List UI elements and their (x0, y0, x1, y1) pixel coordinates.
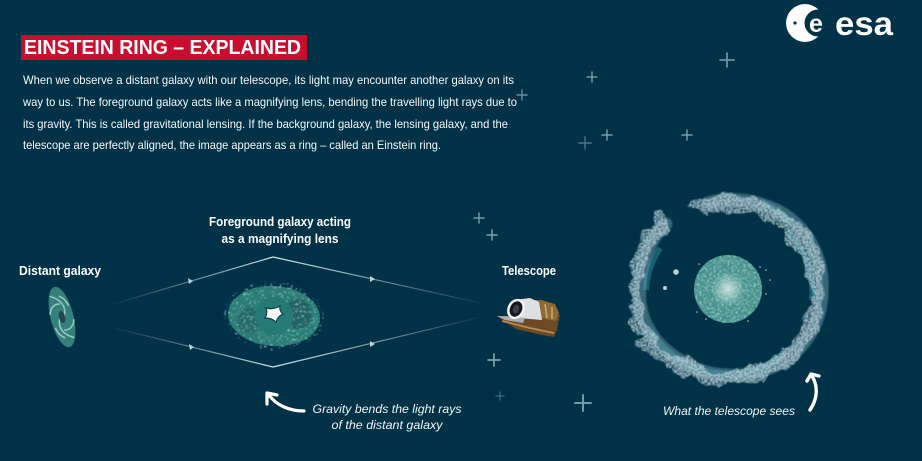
ring: speckled band (634, 203, 817, 378)
label: telescope: Telescope (502, 264, 556, 278)
small background dots (663, 263, 771, 322)
intro text block: telescope are perfectly aligned, the image appears as a ring – called an Einstein ring. (23, 139, 441, 152)
logo: esa: e (809, 10, 823, 38)
light rays (110, 257, 485, 367)
logo: esa (786, 4, 894, 42)
label: foreground galaxy: as a magnifying lens (222, 232, 339, 246)
label: distant galaxy: Distant galaxy (19, 264, 101, 278)
ray: upper path (110, 257, 485, 305)
icon: distant galaxy (43, 284, 81, 350)
caption: gravity: of the distant galaxy (332, 418, 444, 432)
intro text block: its gravity. This is called gravitational lensing. If the background galaxy, the lensing galaxy, and the (23, 118, 508, 131)
stars (474, 53, 734, 411)
icon: foreground lensing galaxy (222, 279, 326, 353)
title: EINSTEIN RING – EXPLAINED (24, 37, 301, 59)
intro text block: When we observe a distant galaxy with our telescope, its light may encounter another galaxy on its (23, 74, 514, 87)
icon: curved arrow to rays (267, 393, 304, 411)
caption: gravity (312, 402, 462, 432)
central galaxy (694, 255, 762, 323)
icon: telescope (497, 296, 560, 337)
lensed core (265, 306, 283, 322)
label: foreground galaxy: Foreground galaxy acting (209, 215, 351, 229)
ring: teal under-glow (646, 201, 812, 374)
ray: lower path (110, 316, 485, 367)
icon: curved arrow to ring (807, 374, 819, 410)
label: foreground galaxy (209, 215, 351, 246)
observed Einstein ring (634, 200, 822, 378)
intro text block: way to us. The foreground galaxy acts like a magnifying lens, bending the travelling light rays due to (22, 96, 517, 109)
caption: gravity: Gravity bends the light rays (312, 402, 462, 416)
ring: soft glow of band (639, 200, 822, 375)
logo: esa: esa (835, 5, 894, 42)
caption: what the telescope sees: What the telescope sees (663, 404, 795, 418)
intro text block (22, 74, 517, 152)
